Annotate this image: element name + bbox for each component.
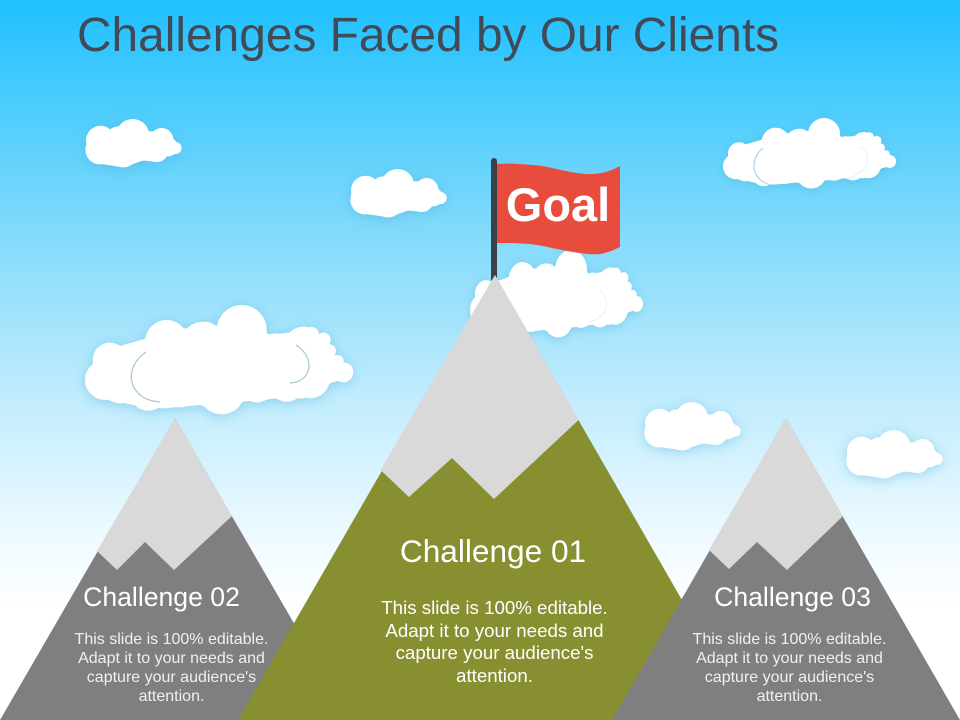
mountain: Challenge 02 bbox=[0, 418, 350, 720]
text block: Challenge 01: Adapt it to your needs and bbox=[385, 620, 604, 641]
title: Challenges Faced by Our Clients bbox=[77, 9, 779, 62]
left mountain body bbox=[0, 418, 350, 720]
cloud: behind main peak bbox=[470, 250, 643, 337]
left mountain snow cap bbox=[97, 418, 232, 570]
flag pole bbox=[491, 158, 497, 282]
heading: Challenge 02: Challenge 02 bbox=[83, 582, 240, 612]
heading: Challenge 01: Challenge 01 bbox=[400, 533, 586, 569]
cloud: lower centre right bbox=[644, 402, 741, 450]
text block: Challenge 02: attention. bbox=[139, 688, 204, 705]
cloud: lower right bbox=[846, 430, 943, 478]
text block: Challenge 02: capture your audience's bbox=[87, 669, 256, 686]
cloud: large left bbox=[85, 305, 353, 414]
right mountain snow cap bbox=[709, 418, 843, 570]
centre mountain body bbox=[238, 275, 751, 720]
cloud: upper right bbox=[723, 118, 896, 189]
flag banner bbox=[497, 164, 620, 254]
text block: Challenge 01: attention. bbox=[456, 665, 533, 686]
cloud: upper left bbox=[85, 119, 182, 167]
centre mountain snow cap bbox=[380, 275, 579, 499]
flag label: Goal bbox=[506, 178, 610, 231]
text block: Challenge 02: This slide is 100% editable. bbox=[75, 631, 268, 648]
cloud: upper centre bbox=[350, 169, 447, 217]
mountain: Challenge 01 bbox=[238, 275, 751, 720]
text block: Challenge 03: This slide is 100% editable. bbox=[693, 631, 886, 648]
text block: Challenge 03: capture your audience's bbox=[705, 669, 874, 686]
text block: Challenge 01: capture your audience's bbox=[396, 642, 593, 663]
text block: Challenge 01: This slide is 100% editable. bbox=[381, 597, 608, 618]
text block: Challenge 03: attention. bbox=[757, 688, 822, 705]
mountain: Challenge 03 bbox=[612, 418, 960, 720]
heading: Challenge 03: Challenge 03 bbox=[714, 582, 871, 612]
icon: goal flag bbox=[491, 158, 620, 282]
text block: Challenge 03: Adapt it to your needs and bbox=[696, 650, 883, 667]
right mountain body bbox=[612, 418, 960, 720]
text block: Challenge 02: Adapt it to your needs and bbox=[78, 650, 265, 667]
